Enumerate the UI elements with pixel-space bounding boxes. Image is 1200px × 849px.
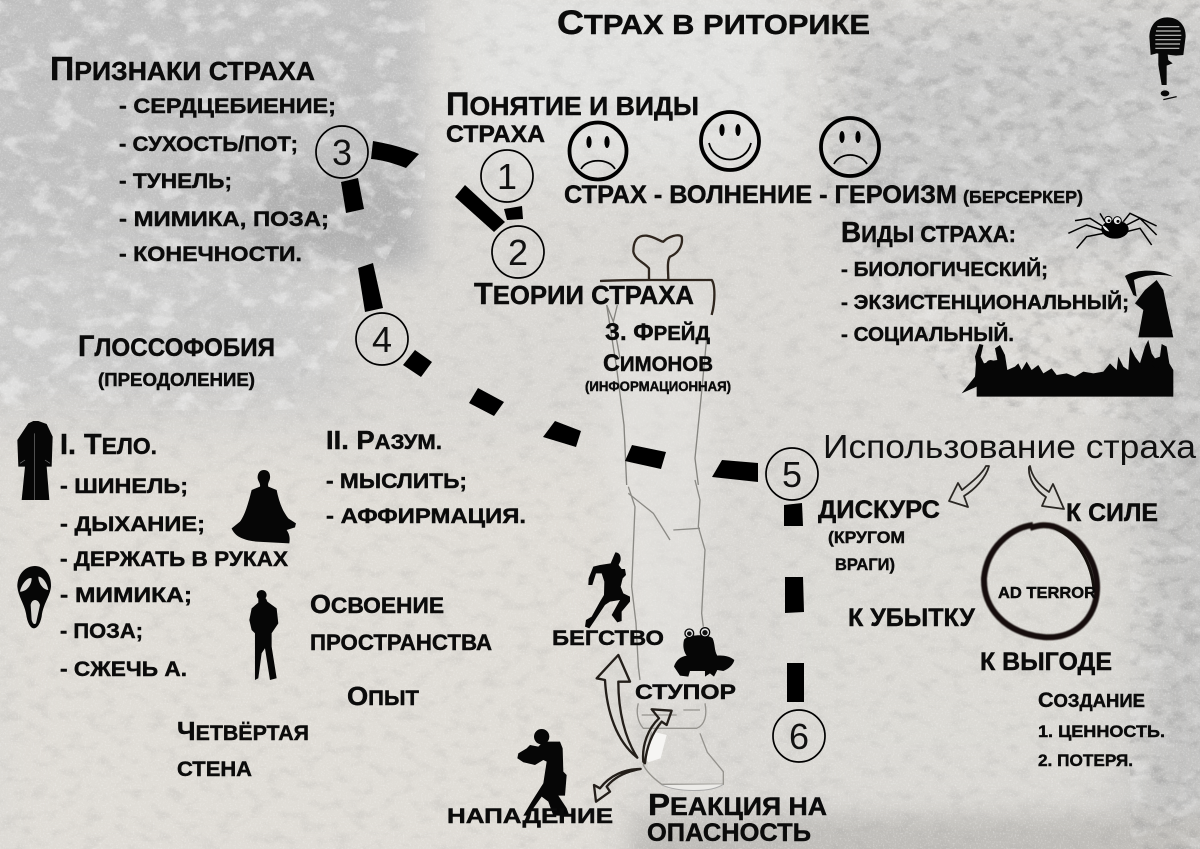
list item: - БИОЛОГИЧЕСКИЙ; <box>841 257 1048 281</box>
text: surrounded by enemies: (КРУГОМ <box>828 528 905 547</box>
text: Freud: З. ФРЕЙД <box>605 319 710 346</box>
icon: overcoat <box>17 421 53 500</box>
list item: - ЭКЗИСТЕНЦИОНАЛЬНЫЙ; <box>841 290 1129 314</box>
heading: signs of fear: ПРИЗНАКИ СТРАХА <box>50 50 315 87</box>
panel: using fear <box>818 428 1197 770</box>
list item: - МИМИКА, ПОЗА; <box>119 208 329 231</box>
icon: meditating figure <box>232 470 296 543</box>
stage numbers: 6 <box>789 716 809 757</box>
list item: - СЕРДЦЕБИЕНИЕ; <box>119 95 336 118</box>
list item: 2. ПОТЕРЯ. <box>1038 751 1133 770</box>
icon: boxer <box>517 729 569 816</box>
heading: mind: II. РАЗУМ. <box>326 425 442 455</box>
panel: kinds of fear <box>841 213 1173 397</box>
icon: cheering crowd <box>962 340 1173 397</box>
panel: reaction to danger <box>447 552 827 847</box>
panel: signs of fear <box>50 50 336 266</box>
list item: - МЫСЛИТЬ; <box>326 470 467 493</box>
icon: happy face <box>701 112 759 170</box>
list item: - ДЫХАНИЕ; <box>60 513 205 536</box>
text: enemies: ВРАГИ) <box>835 555 895 574</box>
stage numbers <box>332 132 809 757</box>
text: Simonov: СИМОНОВ <box>603 350 713 377</box>
icon: scream mask <box>17 566 51 628</box>
label: flight: БЕГСТВО <box>552 627 664 650</box>
heading: mastering space: ОСВОЕНИЕ <box>310 589 444 619</box>
icon: grim reaper <box>1125 271 1173 337</box>
arrow: to flight <box>597 655 637 758</box>
list item: - СОЦИАЛЬНЫЙ. <box>841 322 1014 346</box>
list item: - ТУНЕЛЬ; <box>119 170 232 193</box>
text: of space: ПРОСТРАНСТВА <box>310 630 492 655</box>
arrow: to discourse <box>949 466 989 507</box>
heading: kinds of fear: ВИДЫ СТРАХА: <box>841 217 1016 249</box>
text: experience: ОПЫТ <box>347 681 419 711</box>
list item: - КОНЕЧНОСТИ. <box>119 243 302 266</box>
icon: runner <box>585 552 630 628</box>
label: to loss: К УБЫТКУ <box>848 604 975 632</box>
heading: theories of fear: ТЕОРИИ СТРАХА <box>474 276 694 311</box>
heading: body: I. ТЕЛО. <box>60 429 157 461</box>
stage numbers: 1 <box>497 156 517 197</box>
list item: - АФФИРМАЦИЯ. <box>326 505 526 528</box>
list item: - ШИНЕЛЬ; <box>60 475 188 498</box>
illustration: leg sketch with bone <box>600 235 723 791</box>
list item: - СЖЕЧЬ А. <box>60 658 187 681</box>
list item: - СУХОСТЬ/ПОТ; <box>119 133 298 156</box>
list item: - МИМИКА; <box>60 584 192 607</box>
panel: theories of fear <box>474 276 731 394</box>
heading: concept: ПОНЯТИЕ И ВИДЫ <box>446 86 699 122</box>
text: wall: СТЕНА <box>177 758 252 781</box>
text: fourth wall: ЧЕТВЁРТАЯ <box>177 716 309 746</box>
arrow: to force <box>1029 466 1064 509</box>
text: informational theory: (ИНФОРМАЦИОННАЯ) <box>585 379 731 394</box>
icon: sad face <box>821 118 879 176</box>
title: СТРАХ В РИТОРИКЕ <box>557 4 870 42</box>
icon: sad face <box>570 122 626 180</box>
icon: standing man <box>249 590 278 680</box>
list item: - ПОЗА; <box>60 620 143 643</box>
label: ad terrorem circled: AD TERROR <box>998 585 1096 602</box>
label: discourse: ДИСКУРС <box>818 496 940 524</box>
caption: fear, excitement, heroism: СТРАХ - ВОЛНЕНИЕ - ГЕРОИЗМ <box>564 181 957 209</box>
panel: glossophobia <box>17 330 526 781</box>
heading: glossophobia: ГЛОССОФОБИЯ <box>78 330 275 363</box>
arrow: to attack <box>594 769 641 802</box>
heading: reaction to danger: РЕАКЦИЯ НА <box>648 787 827 822</box>
numbered stage circles <box>316 126 825 762</box>
label: ad terrorem circled <box>984 525 1097 637</box>
caption: berserker: (БЕРСЕРКЕР) <box>963 187 1083 207</box>
subheading: overcoming: (ПРЕОДОЛЕНИЕ) <box>98 370 255 390</box>
stage numbers: 2 <box>508 232 528 273</box>
list item: - ДЕРЖАТЬ В РУКАХ <box>60 548 288 571</box>
path: dashed route connecting numbered stages <box>341 141 804 702</box>
stage numbers: 5 <box>782 454 802 495</box>
text: creating: СОЗДАНИЕ <box>1038 689 1145 712</box>
stage numbers: 3 <box>332 132 352 173</box>
label: to force: К СИЛЕ <box>1066 499 1158 527</box>
icon: frog <box>674 628 734 677</box>
label: attack: НАПАДЕНИЕ <box>447 805 613 828</box>
label: to benefit: К ВЫГОДЕ <box>980 648 1112 676</box>
stage numbers: 4 <box>372 319 392 360</box>
heading: danger: ОПАСНОСТЬ <box>647 819 811 847</box>
icon: microphone <box>1149 17 1186 100</box>
arrow: to freeze <box>643 709 672 763</box>
panel: concept and types of fear <box>446 86 1083 209</box>
icon: spider <box>1068 213 1157 248</box>
label: freeze: СТУПОР <box>635 681 736 704</box>
list item: 1. ЦЕННОСТЬ. <box>1038 722 1165 741</box>
heading: using fear: Использование страха <box>823 428 1197 465</box>
heading: of fear: СТРАХА <box>446 121 545 148</box>
